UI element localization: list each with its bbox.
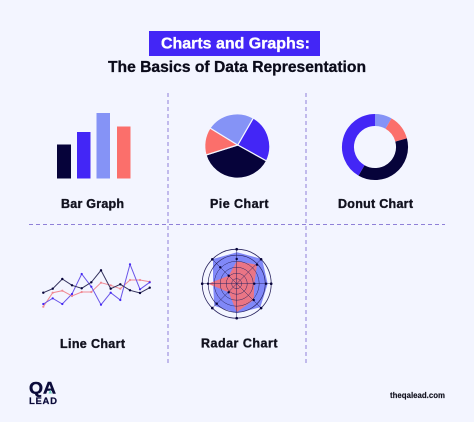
radar chart xyxy=(201,248,273,320)
donut chart xyxy=(348,120,402,174)
panel: donut chart xyxy=(338,120,414,211)
logo: QA Lead: QA xyxy=(29,380,56,398)
title xyxy=(108,31,366,76)
panel: bar graph xyxy=(57,113,130,211)
label: line chart: Line Chart xyxy=(60,337,126,351)
pie chart xyxy=(205,114,270,178)
logo: QA Lead xyxy=(29,380,57,407)
panel: line chart xyxy=(42,263,151,351)
line chart xyxy=(42,263,151,308)
label: bar graph: Bar Graph xyxy=(61,197,124,211)
panel: radar chart xyxy=(201,248,278,350)
title: The Basics of Data Representation xyxy=(108,59,366,76)
label: radar chart: Radar Chart xyxy=(201,336,278,350)
panel: pie chart xyxy=(205,114,270,211)
label: donut chart: Donut Chart xyxy=(338,197,414,211)
bar chart xyxy=(57,113,130,178)
logo: QA Lead: LEAD xyxy=(29,396,57,407)
label: pie chart: Pie Chart xyxy=(210,197,269,211)
title: Charts and Graphs: xyxy=(161,36,310,52)
website url: theqalead.com xyxy=(390,390,445,400)
